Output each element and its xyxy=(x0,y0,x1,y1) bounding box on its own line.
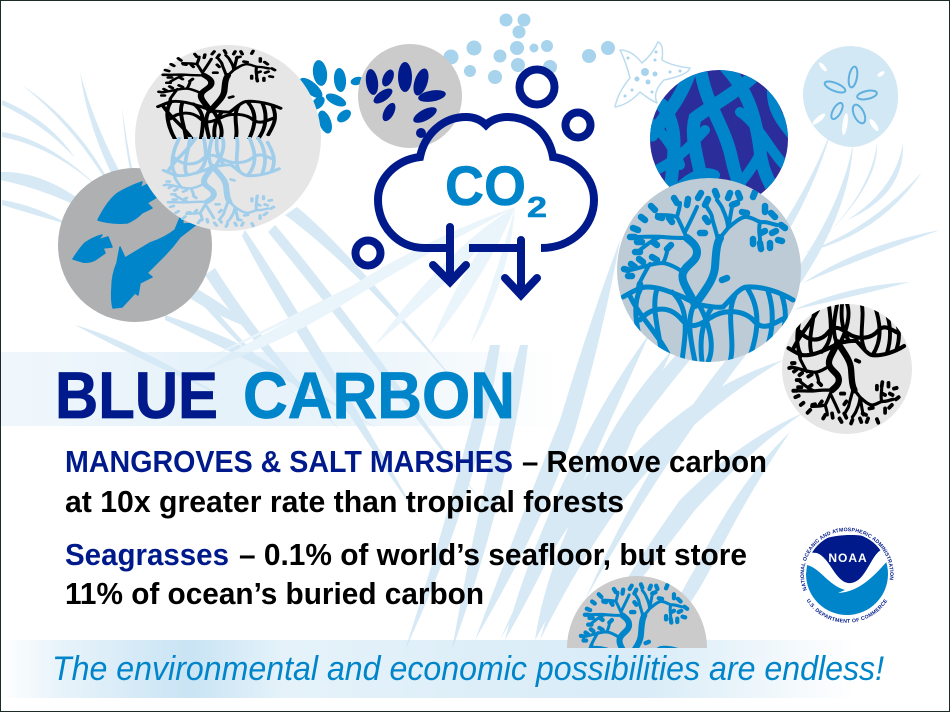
seal text top: NATIONAL OCEANIC AND ATMOSPHERIC ADMINISTRATION xyxy=(800,528,894,591)
title xyxy=(55,358,515,432)
bottom tagline band xyxy=(0,640,950,698)
tree black above water xyxy=(158,50,280,141)
text block: seagrasses xyxy=(65,537,747,611)
icon: bubbles xyxy=(444,14,615,84)
text block: seagrasses: 11% of ocean’s buried carbon xyxy=(65,576,484,611)
text block: seagrasses: Seagrasses xyxy=(65,537,229,572)
text block: mangroves and salt marshes: at 10x greater rate than tropical forests xyxy=(65,484,624,519)
circle: mangrove above and below water xyxy=(135,45,321,231)
circle: black inverted mangrove xyxy=(782,302,912,434)
title: CARBON xyxy=(243,358,515,432)
cloud outline xyxy=(378,117,594,248)
icon: sand dollar xyxy=(803,46,898,147)
tree reflection below water xyxy=(164,136,279,227)
text block: mangroves and salt marshes: – Remove carbon xyxy=(522,444,767,479)
icon: ring bubbles xyxy=(356,70,590,266)
tree xyxy=(623,191,793,362)
seal text bottom: U.S. DEPARTMENT OF COMMERCE xyxy=(807,598,888,623)
NOAA wordmark: NOAA xyxy=(828,551,868,565)
tree xyxy=(789,302,904,423)
text block: seagrasses: – 0.1% of world’s seafloor, but store xyxy=(239,537,747,572)
CO2 label: CO xyxy=(445,154,526,217)
circle: fish xyxy=(58,168,212,322)
navy sky xyxy=(812,535,880,584)
tree xyxy=(578,582,690,648)
text block: mangroves and salt marshes xyxy=(65,444,767,519)
half circle mangrove xyxy=(567,576,707,648)
fish shapes xyxy=(73,182,198,308)
NOAA logo xyxy=(800,528,894,623)
circle: blue mangrove tree xyxy=(617,178,801,362)
CO2 label: 2 xyxy=(527,192,547,224)
title: BLUE xyxy=(55,358,218,432)
icon: blue leaf cluster xyxy=(296,59,364,135)
circle: navy leaves xyxy=(358,44,462,148)
blue wave xyxy=(806,562,888,615)
heading band xyxy=(0,352,560,426)
circle: seagrass xyxy=(650,70,788,194)
icon: starfish xyxy=(615,42,690,107)
tagline: The environmental and economic possibilities are endless! xyxy=(52,650,885,688)
text block: mangroves and salt marshes: MANGROVES & SALT MARSHES xyxy=(65,444,513,479)
icon: CO2 cloud with arrows xyxy=(378,117,594,295)
arrows xyxy=(433,227,537,295)
